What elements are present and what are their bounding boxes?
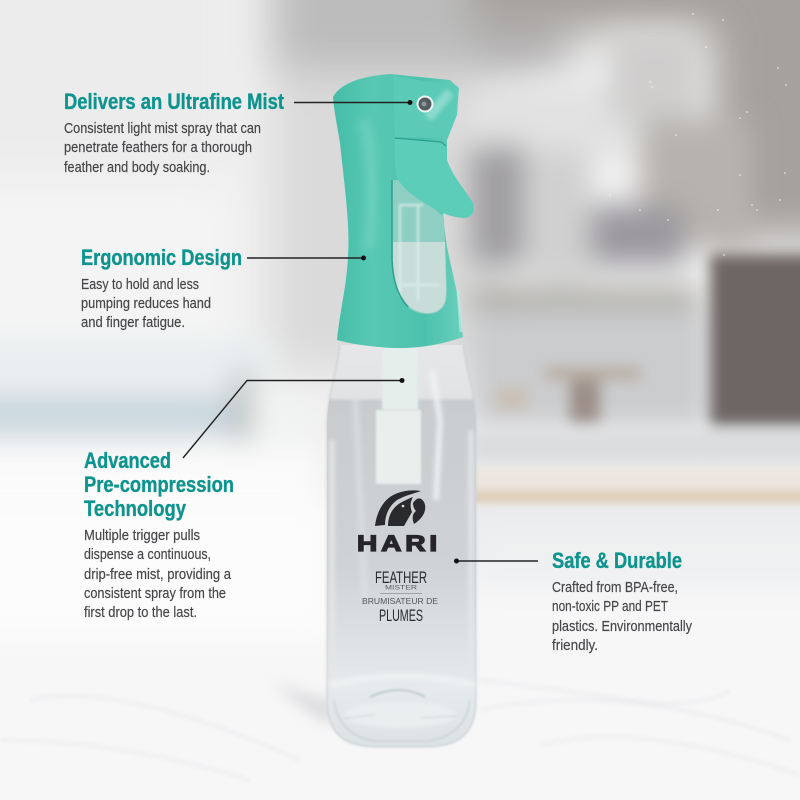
body text: Consistent light mist spray that can [64,121,261,137]
callout: ultrafine mist [64,89,412,176]
body text: feather and body soaking. [64,160,210,176]
heading: Safe & Durable [552,548,682,573]
body text: drip-free mist, providing a [84,567,232,583]
nozzle [416,96,434,112]
bottle label: HARI logo: PLUMES [379,606,423,625]
product: spray bottle [327,74,476,747]
heading: Ergonomic Design [81,245,242,270]
body text: Crafted from BPA-free, [552,580,678,596]
callout: pre-compression [84,378,404,621]
dip tube [376,348,421,484]
callout: ergonomic design [81,245,366,331]
parrot logo [375,490,425,526]
heading [84,448,234,521]
body text: dispense a continuous, [84,547,211,563]
leader line [454,558,538,564]
body text: and finger fatigue. [81,315,185,331]
body text: non-toxic PP and PET [552,599,668,615]
body text: consistent spray from the [84,586,226,602]
body text: Easy to hold and less [81,277,199,293]
heading: Delivers an Ultrafine Mist [64,89,285,114]
bottle label: HARI logo [357,490,441,625]
body text: plastics. Environmentally [552,619,693,635]
trigger [395,138,474,218]
body text [81,277,211,331]
bottle label: HARI logo: MISTER [385,584,417,592]
bottle body [327,345,476,747]
leader line [294,100,412,105]
heading: Advanced [84,448,171,473]
spray mist particles [609,13,787,256]
body text: penetrate feathers for a thorough [64,140,252,156]
body text: friendly. [552,638,598,654]
grip window [392,180,447,314]
bottle label: HARI logo: HARI [357,531,441,556]
leader line [247,256,366,260]
body text [84,528,232,621]
body text: Multiple trigger pulls [84,528,200,544]
callout: safe and durable [454,548,693,654]
body text: first drop to the last. [84,605,197,621]
body text: pumping reduces hand [81,296,211,312]
heading: Pre-compression [84,472,234,497]
leader line [183,378,404,458]
body text [64,121,261,176]
bottle label: HARI logo: FEATHER [375,568,427,587]
sprayer head [333,74,474,348]
bottle label: HARI logo: BRUMISATEUR DE [362,597,438,606]
heading: Technology [84,496,187,521]
body text [552,580,693,654]
